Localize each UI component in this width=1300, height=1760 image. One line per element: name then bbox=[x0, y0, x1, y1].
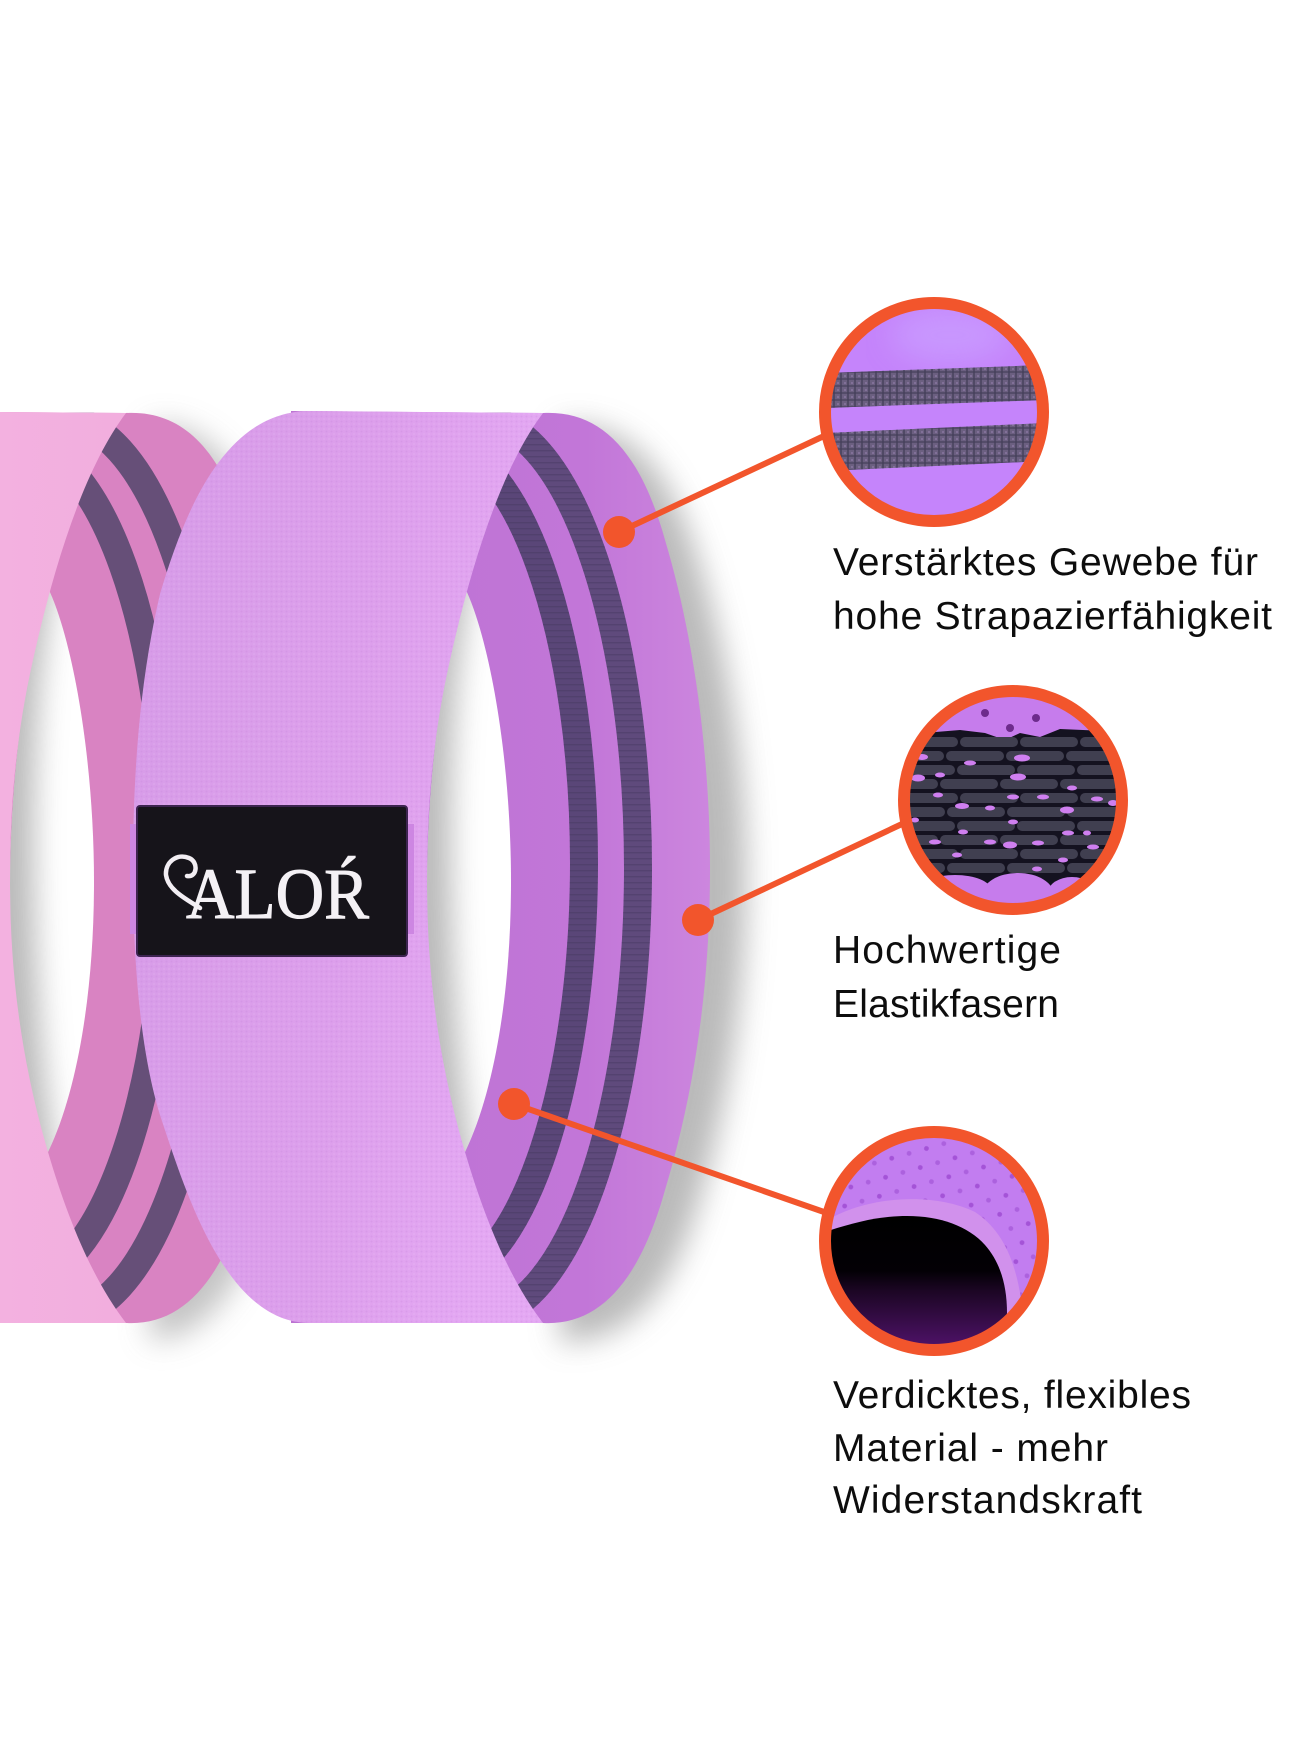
caption: reinforced fabric: hohe Strapazierfähigkeit bbox=[833, 595, 1272, 638]
caption: elastic fibres: Hochwertige bbox=[833, 929, 1061, 972]
lavender band fabric weave bbox=[133, 411, 543, 1323]
band: pink resistance band bbox=[0, 412, 246, 1351]
connector: top callout bbox=[603, 436, 824, 548]
caption: elastic fibres bbox=[833, 929, 1061, 1026]
fabric close-up bbox=[831, 309, 1037, 515]
pink band inner side bbox=[0, 411, 293, 1323]
orange ring bbox=[904, 691, 1122, 909]
pink band opening bbox=[10, 588, 94, 1152]
caption: thick material bbox=[833, 1374, 1191, 1522]
connector lines bbox=[498, 436, 902, 1212]
caption: thick material: Material - mehr bbox=[833, 1427, 1108, 1470]
caption: reinforced fabric bbox=[833, 541, 1272, 638]
caption: elastic fibres: Elastikfasern bbox=[833, 983, 1059, 1026]
caption: thick material: Widerstandskraft bbox=[833, 1479, 1142, 1522]
caption: thick material: Verdicktes, flexibles bbox=[833, 1374, 1191, 1417]
orange ring bbox=[825, 303, 1043, 521]
pink band dark stripes bbox=[68, 412, 187, 1309]
pink band opening shadow bbox=[10, 592, 66, 1152]
caption: reinforced fabric: Verstärktes Gewebe für bbox=[833, 541, 1258, 584]
lavender band dark stripes bbox=[486, 412, 652, 1309]
lavender band opening shadow bbox=[427, 592, 482, 1152]
material close-up bbox=[831, 1138, 1037, 1344]
pink band shadow bbox=[150, 425, 268, 1340]
detail circle: thick material bbox=[820, 1130, 1050, 1360]
lavender band front face bbox=[133, 411, 543, 1323]
orange ring bbox=[825, 1132, 1043, 1350]
logo label bbox=[130, 806, 414, 956]
connector: bottom callout bbox=[498, 1088, 824, 1212]
logo wordmark: ALOŔ bbox=[186, 854, 369, 934]
lavender band inner side bbox=[291, 411, 710, 1323]
logo swirl bbox=[166, 857, 200, 908]
detail circle: reinforced fabric bbox=[820, 298, 1050, 528]
pink band front face bbox=[0, 411, 126, 1323]
fibre close-up bbox=[910, 697, 1116, 903]
band: lavender resistance band bbox=[133, 411, 746, 1342]
label black patch bbox=[137, 806, 407, 956]
connector: middle callout bbox=[682, 824, 902, 936]
lavender band opening bbox=[427, 588, 511, 1152]
detail circle: elastic fibres bbox=[885, 685, 1130, 917]
lavender band shadow bbox=[560, 425, 746, 1342]
label purple backing bbox=[130, 824, 414, 934]
